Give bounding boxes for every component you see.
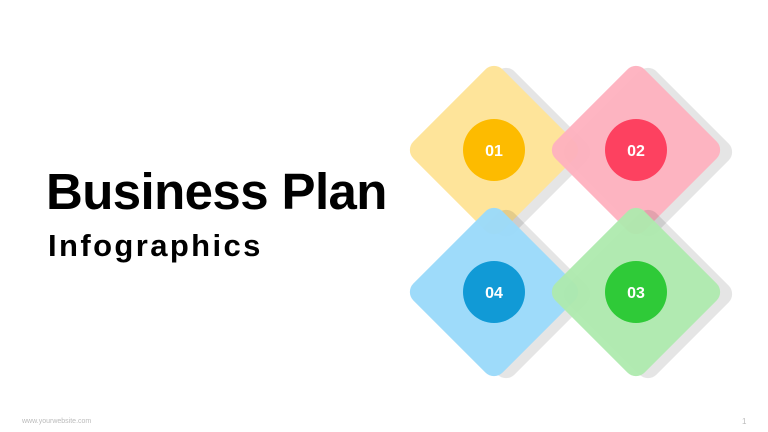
page number: 1 bbox=[742, 417, 746, 426]
diamond 04 bbox=[405, 203, 595, 383]
diamond 02 bbox=[547, 61, 737, 241]
diamond 04: 04 bbox=[485, 285, 503, 302]
diamond 02: 02 bbox=[627, 143, 645, 160]
diamond 01 bbox=[405, 61, 595, 241]
subtitle: Infographics bbox=[48, 228, 263, 263]
title: Business Plan bbox=[46, 163, 387, 220]
footer website: www.yourwebsite.com bbox=[22, 418, 91, 425]
diamond 03: 03 bbox=[627, 285, 645, 302]
diamond 01: 01 bbox=[485, 143, 503, 160]
diamond 03 bbox=[547, 203, 737, 383]
